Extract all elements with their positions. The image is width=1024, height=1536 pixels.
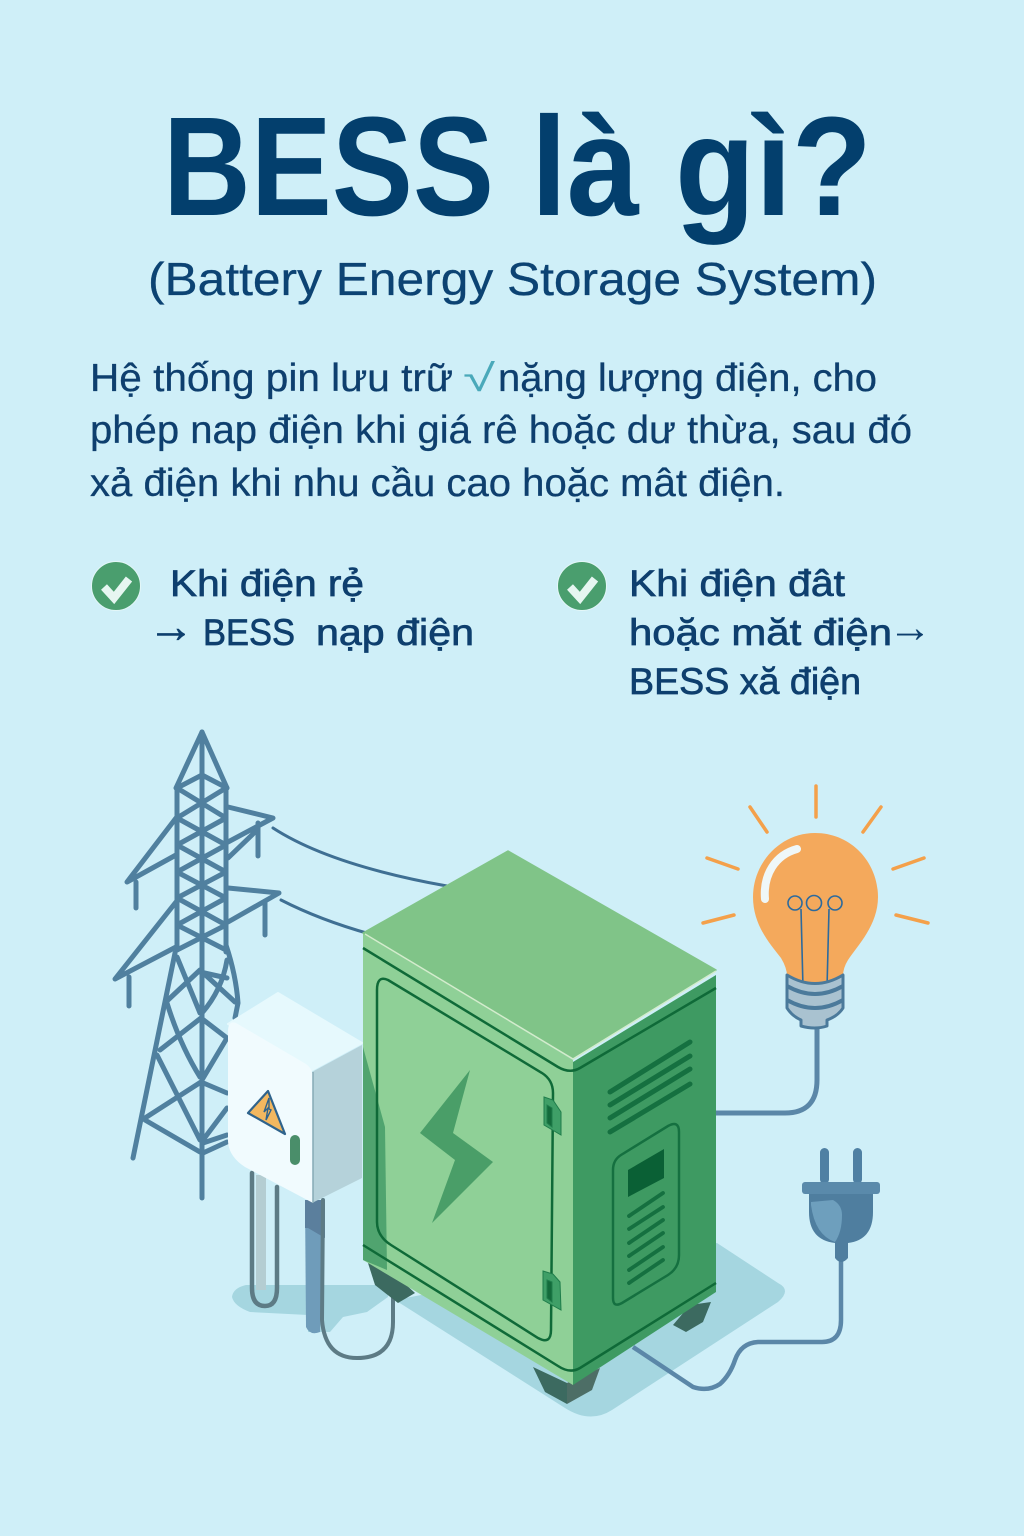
shadow from box xyxy=(363,1047,387,1270)
description text block: √ xyxy=(463,358,495,400)
cabinet left face xyxy=(363,933,573,1385)
box side xyxy=(312,1045,362,1203)
cable from cabinet to plug xyxy=(633,1260,841,1389)
bulb highlight xyxy=(765,849,797,899)
bulb glass xyxy=(753,833,878,984)
junction box xyxy=(228,993,362,1203)
door hinges xyxy=(543,1097,561,1310)
title: BESS xyxy=(163,87,494,245)
title: là xyxy=(531,87,640,245)
bulb rays xyxy=(703,786,928,923)
callout: discharging when expensive: hoặc măt điện xyxy=(629,612,892,653)
door outline xyxy=(377,979,553,1340)
cabinet top xyxy=(363,851,716,1059)
transmission tower xyxy=(115,732,279,1198)
box front xyxy=(228,1022,313,1203)
cabinet feet xyxy=(368,1263,711,1404)
box top xyxy=(228,993,362,1070)
title: gì? xyxy=(675,87,872,245)
bulb screw base xyxy=(787,975,843,1028)
light bulb xyxy=(703,786,928,1028)
control panel xyxy=(613,1124,679,1305)
icon: lightning bolt xyxy=(420,1070,493,1223)
plug bar xyxy=(802,1182,880,1194)
description text block: phép nap điện khi giá rê hoặc dư thừa, sau đó xyxy=(90,409,912,452)
callout: discharging when expensive xyxy=(558,562,932,702)
callout: discharging when expensive: Khi điện đât xyxy=(629,563,846,604)
cabinet trim lines xyxy=(363,948,716,1371)
plug xyxy=(802,1148,880,1262)
shadow under cabinet xyxy=(395,1243,785,1417)
callout: charging when cheap: nạp điện xyxy=(316,612,474,653)
callout: charging when cheap: Khi điện rẹ̉ xyxy=(170,563,364,604)
plug body xyxy=(809,1192,873,1262)
cable from cabinet to bulb xyxy=(716,1025,817,1113)
description text block xyxy=(90,357,912,505)
subtitle: (Battery Energy Storage System) xyxy=(148,253,877,305)
icon: green check left xyxy=(92,562,140,610)
callout: discharging when expensive: → xyxy=(888,603,932,652)
description text block: Hệ thống pin lưu trữ xyxy=(90,357,453,400)
cables under junction box xyxy=(252,1173,393,1358)
callout: discharging when expensive: BESS xă điện xyxy=(629,661,861,702)
description text block: nặng lượng điện, cho xyxy=(498,357,877,400)
icon: warning triangle xyxy=(248,1091,285,1134)
battery cabinet xyxy=(363,851,716,1404)
callout: charging when cheap: BESS xyxy=(203,612,295,653)
callout: charging when cheap xyxy=(92,562,474,653)
plug prongs xyxy=(820,1148,829,1184)
shadow under junction box xyxy=(232,1285,388,1332)
title xyxy=(163,87,872,245)
description text block: xả điện khi nhu cầu cao hoặc mât điện. xyxy=(90,462,785,505)
filament xyxy=(788,896,842,988)
vent slots xyxy=(610,1042,690,1132)
power lines xyxy=(273,828,447,934)
callout: charging when cheap: → xyxy=(148,600,194,652)
box handle xyxy=(290,1135,300,1165)
icon: green check right xyxy=(558,562,606,610)
cabinet right face xyxy=(573,975,716,1385)
